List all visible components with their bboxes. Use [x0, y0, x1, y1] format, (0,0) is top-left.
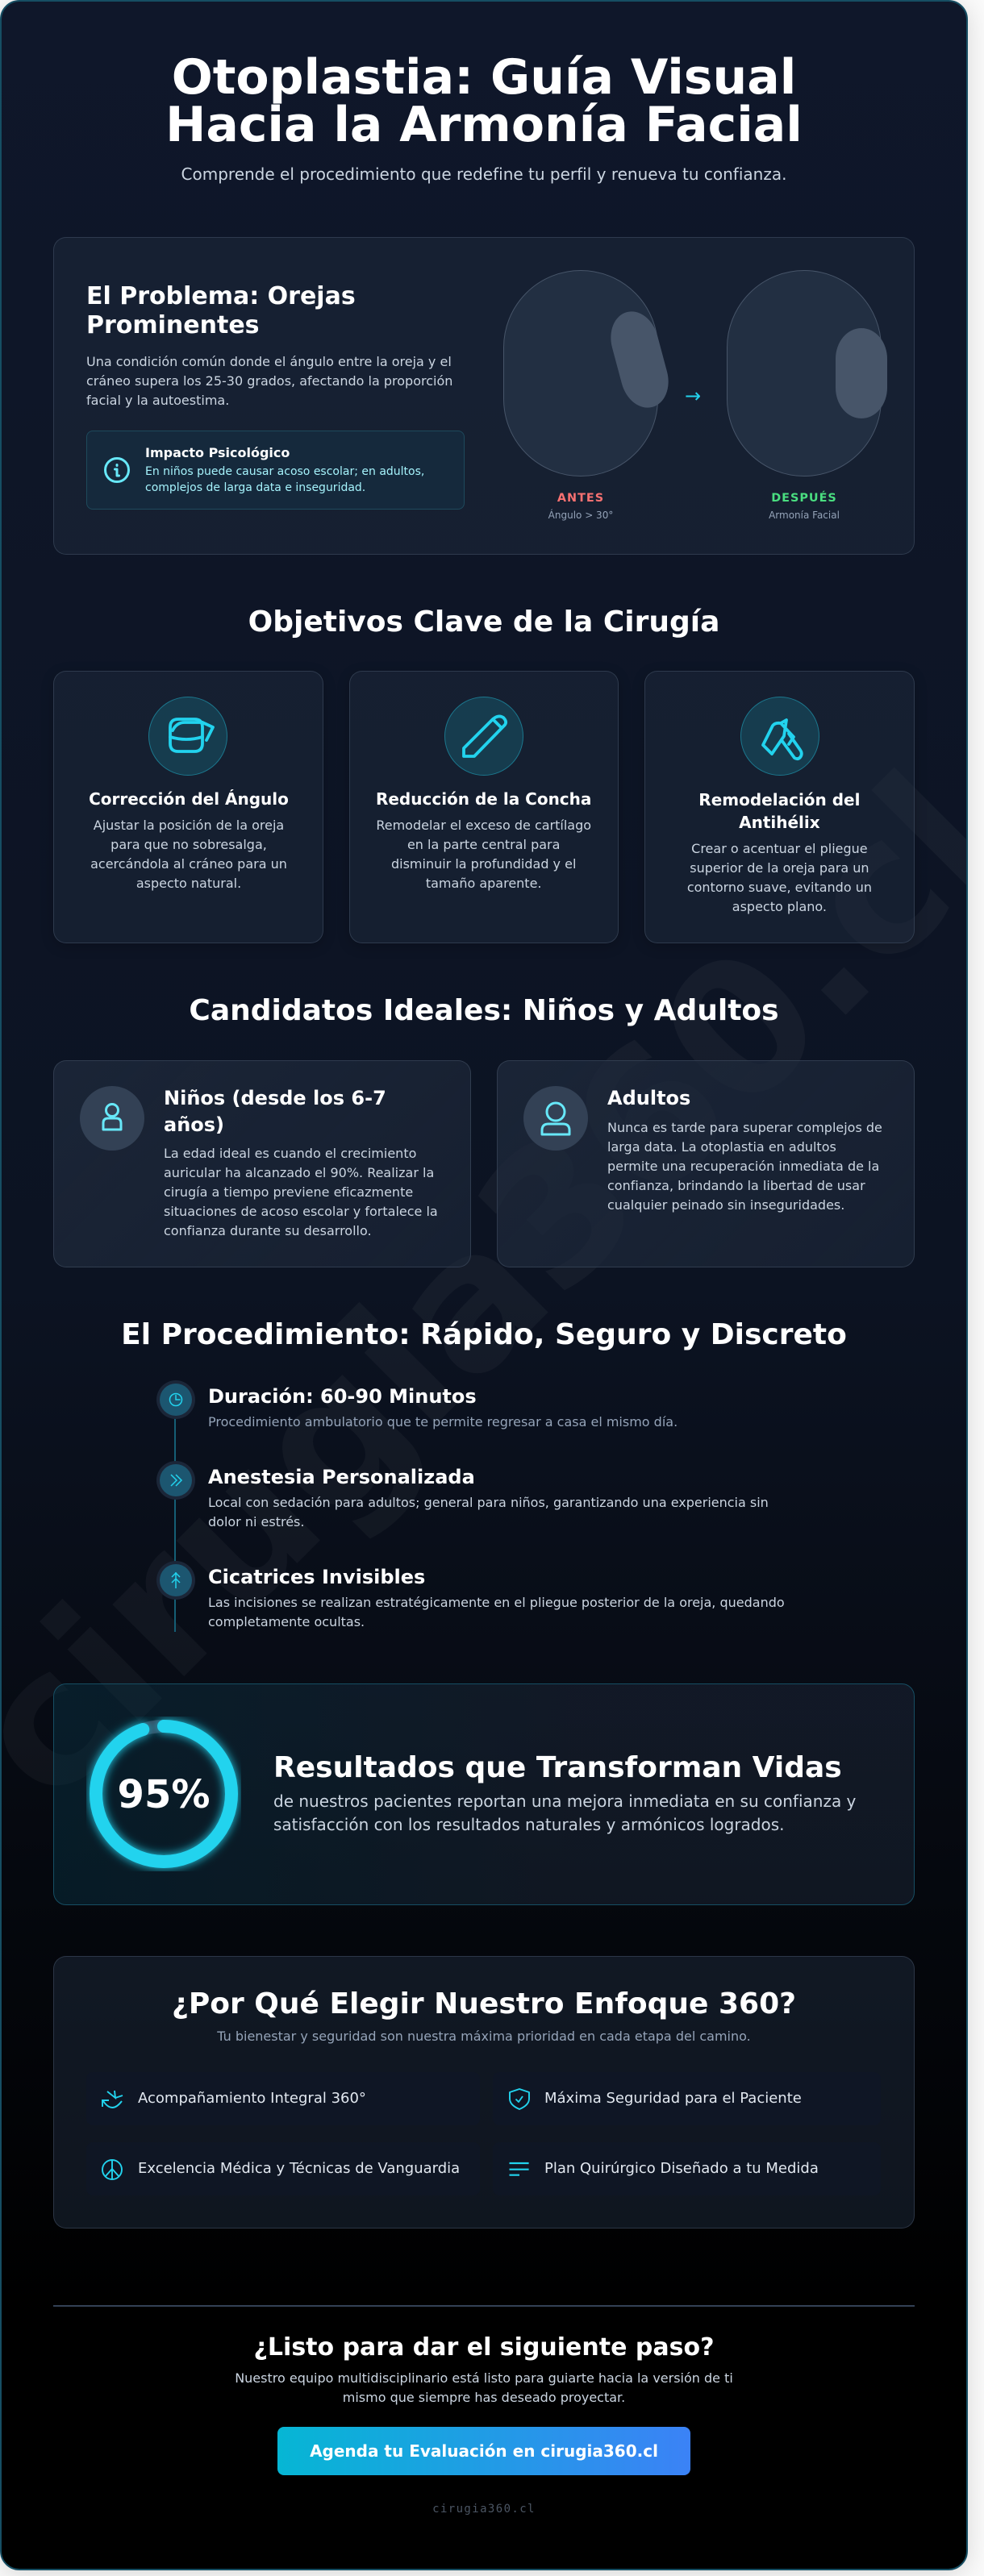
button: cta [277, 2427, 690, 2475]
timeline [156, 1380, 785, 1632]
card title: Niños (desde los 6-7 [164, 1087, 386, 1109]
text: cta: Nuestro equipo multidisciplinario está listo para guiarte hacia la versión de ti [235, 2370, 733, 2386]
icon: info [104, 457, 130, 483]
icon: cycle [102, 2090, 123, 2108]
text: problem description: cráneo supera los 25-30 grados, afectando la proporción [86, 373, 452, 389]
icon: child [80, 1086, 144, 1151]
diagram: después [727, 270, 882, 476]
step marker: arrows up [160, 1564, 192, 1596]
diagram: antes [503, 270, 658, 476]
text: resultados [273, 1792, 856, 1834]
card text: Ajustar la posición de la oreja [94, 818, 284, 833]
icon: pencil [444, 697, 523, 776]
panel: reducción de la concha [349, 671, 619, 943]
step text: Local con sedación para adultos; general para niños, garantizando una experiencia sin [208, 1495, 769, 1510]
panel: niños [53, 1060, 471, 1267]
card text: Remodelar el exceso de cartílago [376, 818, 591, 833]
card text [90, 818, 287, 891]
panel: enfoque 360 [53, 1956, 915, 2229]
card text [607, 1120, 882, 1213]
title: Otoplastia: Guía Visual [172, 48, 796, 105]
card text: Nunca es tarde para superar complejos de [607, 1120, 882, 1135]
callout title: Impacto Psicológico [145, 445, 290, 460]
heading: resultados: Resultados que Transforman Vidas [273, 1751, 842, 1784]
card text: aspecto natural. [136, 876, 241, 891]
subtitle: enfoque 360: Tu bienestar y seguridad son nuestra máxima prioridad en cada etapa del camino. [217, 2029, 751, 2044]
title [165, 48, 803, 153]
label: después: DESPUÉS [771, 492, 837, 505]
card text: en la parte central para [407, 837, 560, 852]
step marker: chevrons [160, 1464, 192, 1496]
card title: Adultos [607, 1087, 690, 1109]
step text: Las incisiones se realizan estratégicamente en el pliegue posterior de la oreja, quedando [208, 1595, 785, 1610]
card text: permite una recuperación inmediata de la [607, 1159, 879, 1174]
chart: 95% ring: 95% [118, 1772, 210, 1817]
heading: cta: ¿Listo para dar el siguiente paso? [254, 2333, 714, 2362]
text: problem description [86, 354, 452, 408]
button: cta: Agenda tu Evaluación en cirugia360.cl [310, 2441, 658, 2461]
text: resultados: satisfacción con los resultados naturales y armónicos logrados. [273, 1815, 785, 1834]
panel: adultos [497, 1060, 915, 1267]
card text: superior de la oreja para un [690, 860, 869, 876]
text: problem description: facial y la autoestima. [86, 393, 229, 408]
heading: el problema [86, 282, 356, 339]
icon: jug [148, 697, 227, 776]
step title: Cicatrices Invisibles [208, 1566, 425, 1588]
panel: el problema [53, 237, 915, 555]
text: problem description: Una condición común donde el ángulo entre la oreja y el [86, 354, 452, 369]
feature text: Plan Quirúrgico Diseñado a tu Medida [544, 2160, 819, 2177]
feature text: Acompañamiento Integral 360° [138, 2090, 366, 2107]
card title [164, 1087, 386, 1135]
feature: plan [493, 2142, 881, 2195]
card text: aspecto plano. [732, 899, 827, 914]
card text: contorno suave, evitando un [687, 880, 872, 895]
arrow: → [685, 385, 701, 407]
icon: tools [740, 697, 819, 776]
card text [687, 841, 872, 914]
icon: lines [510, 2162, 529, 2176]
text: resultados: de nuestros pacientes reportan una mejora inmediata en su confianza y [273, 1792, 856, 1811]
card text: confianza, brindando la libertad de usar [607, 1178, 865, 1193]
feature text: Máxima Seguridad para el Paciente [544, 2090, 802, 2107]
step title: Duración: 60-90 Minutos [208, 1385, 477, 1408]
heading: el problema: Prominentes [86, 311, 260, 339]
label: antes: ANTES [557, 492, 604, 505]
caption: después: Armonía Facial [769, 510, 840, 521]
subtitle: Comprende el procedimiento que redefine tu perfil y renueva tu confianza. [181, 164, 786, 184]
card text: confianza durante su desarrollo. [164, 1223, 372, 1238]
card text: La edad ideal es cuando el crecimiento [164, 1146, 416, 1161]
text: cta: mismo que siempre has deseado proyectar. [343, 2390, 625, 2405]
feature: seguridad [493, 2072, 881, 2125]
card text: larga data. La otoplastia en adultos [607, 1139, 836, 1155]
card title: Reducción de la Concha [376, 789, 591, 809]
timeline line [174, 1400, 176, 1632]
step text: completamente ocultas. [208, 1614, 365, 1629]
card title: Corrección del Ángulo [89, 789, 289, 809]
card title: años) [164, 1113, 224, 1135]
panel: corrección del ángulo [53, 671, 323, 943]
chart: 95% ring [86, 1717, 241, 1871]
feature: acompañamiento [86, 2072, 480, 2125]
icon: shield [509, 2088, 530, 2110]
text: cta [235, 2370, 733, 2405]
footer: cirugia360.cl [432, 2503, 536, 2516]
icon: peace [102, 2159, 123, 2180]
card text: cirugía a tiempo previene eficazmente [164, 1184, 413, 1200]
panel: resultados [53, 1683, 915, 1905]
feature text: Excelencia Médica y Técnicas de Vanguardia [138, 2160, 460, 2177]
card text: tamaño aparente. [426, 876, 542, 891]
feature: excelencia [86, 2142, 480, 2195]
caption: antes: Ángulo > 30° [548, 510, 613, 521]
callout text: En niños puede causar acoso escolar; en adultos, [145, 465, 424, 478]
heading: objetivos: Objetivos Clave de la Cirugía [248, 606, 719, 639]
heading: enfoque 360: ¿Por Qué Elegir Nuestro Enfoque 360? [172, 1987, 796, 2020]
callout: impacto psicológico [86, 431, 465, 510]
step marker: clock [160, 1384, 192, 1416]
card title: Remodelación del [698, 790, 860, 809]
card text: auricular ha alcanzado el 90%. Realizar la [164, 1165, 434, 1180]
card text [376, 818, 591, 891]
diagram: después ear [836, 328, 887, 418]
card text: acercándola al cráneo para un [90, 856, 287, 872]
card text [164, 1146, 438, 1238]
card text: disminuir la profundidad y el [391, 856, 576, 872]
card text: para que no sobresalga, [110, 837, 267, 852]
icon: adult [523, 1086, 588, 1151]
card title: Antihélix [739, 813, 820, 832]
step text [208, 1495, 769, 1529]
card text: Crear o acentuar el pliegue [691, 841, 868, 856]
step text: dolor ni estrés. [208, 1514, 304, 1529]
step text: Procedimiento ambulatorio que te permite regresar a casa el mismo día. [208, 1414, 678, 1429]
card text: cualquier peinado sin inseguridades. [607, 1197, 844, 1213]
callout text: complejos de larga data e inseguridad. [145, 481, 365, 494]
title: Hacia la Armonía Facial [165, 97, 803, 153]
step title: Anestesia Personalizada [208, 1466, 475, 1488]
callout text [145, 465, 424, 494]
panel: remodelación del antihélix [644, 671, 915, 943]
heading: candidatos: Candidatos Ideales: Niños y Adultos [189, 994, 779, 1027]
diagram: antes ear [604, 306, 675, 413]
heading: procedimiento: El Procedimiento: Rápido, Seguro y Discreto [121, 1318, 847, 1351]
divider [53, 2305, 915, 2307]
step text [208, 1595, 785, 1629]
card title [698, 790, 860, 832]
card text: situaciones de acoso escolar y fortalece la [164, 1204, 438, 1219]
heading: el problema: El Problema: Orejas [86, 282, 356, 310]
